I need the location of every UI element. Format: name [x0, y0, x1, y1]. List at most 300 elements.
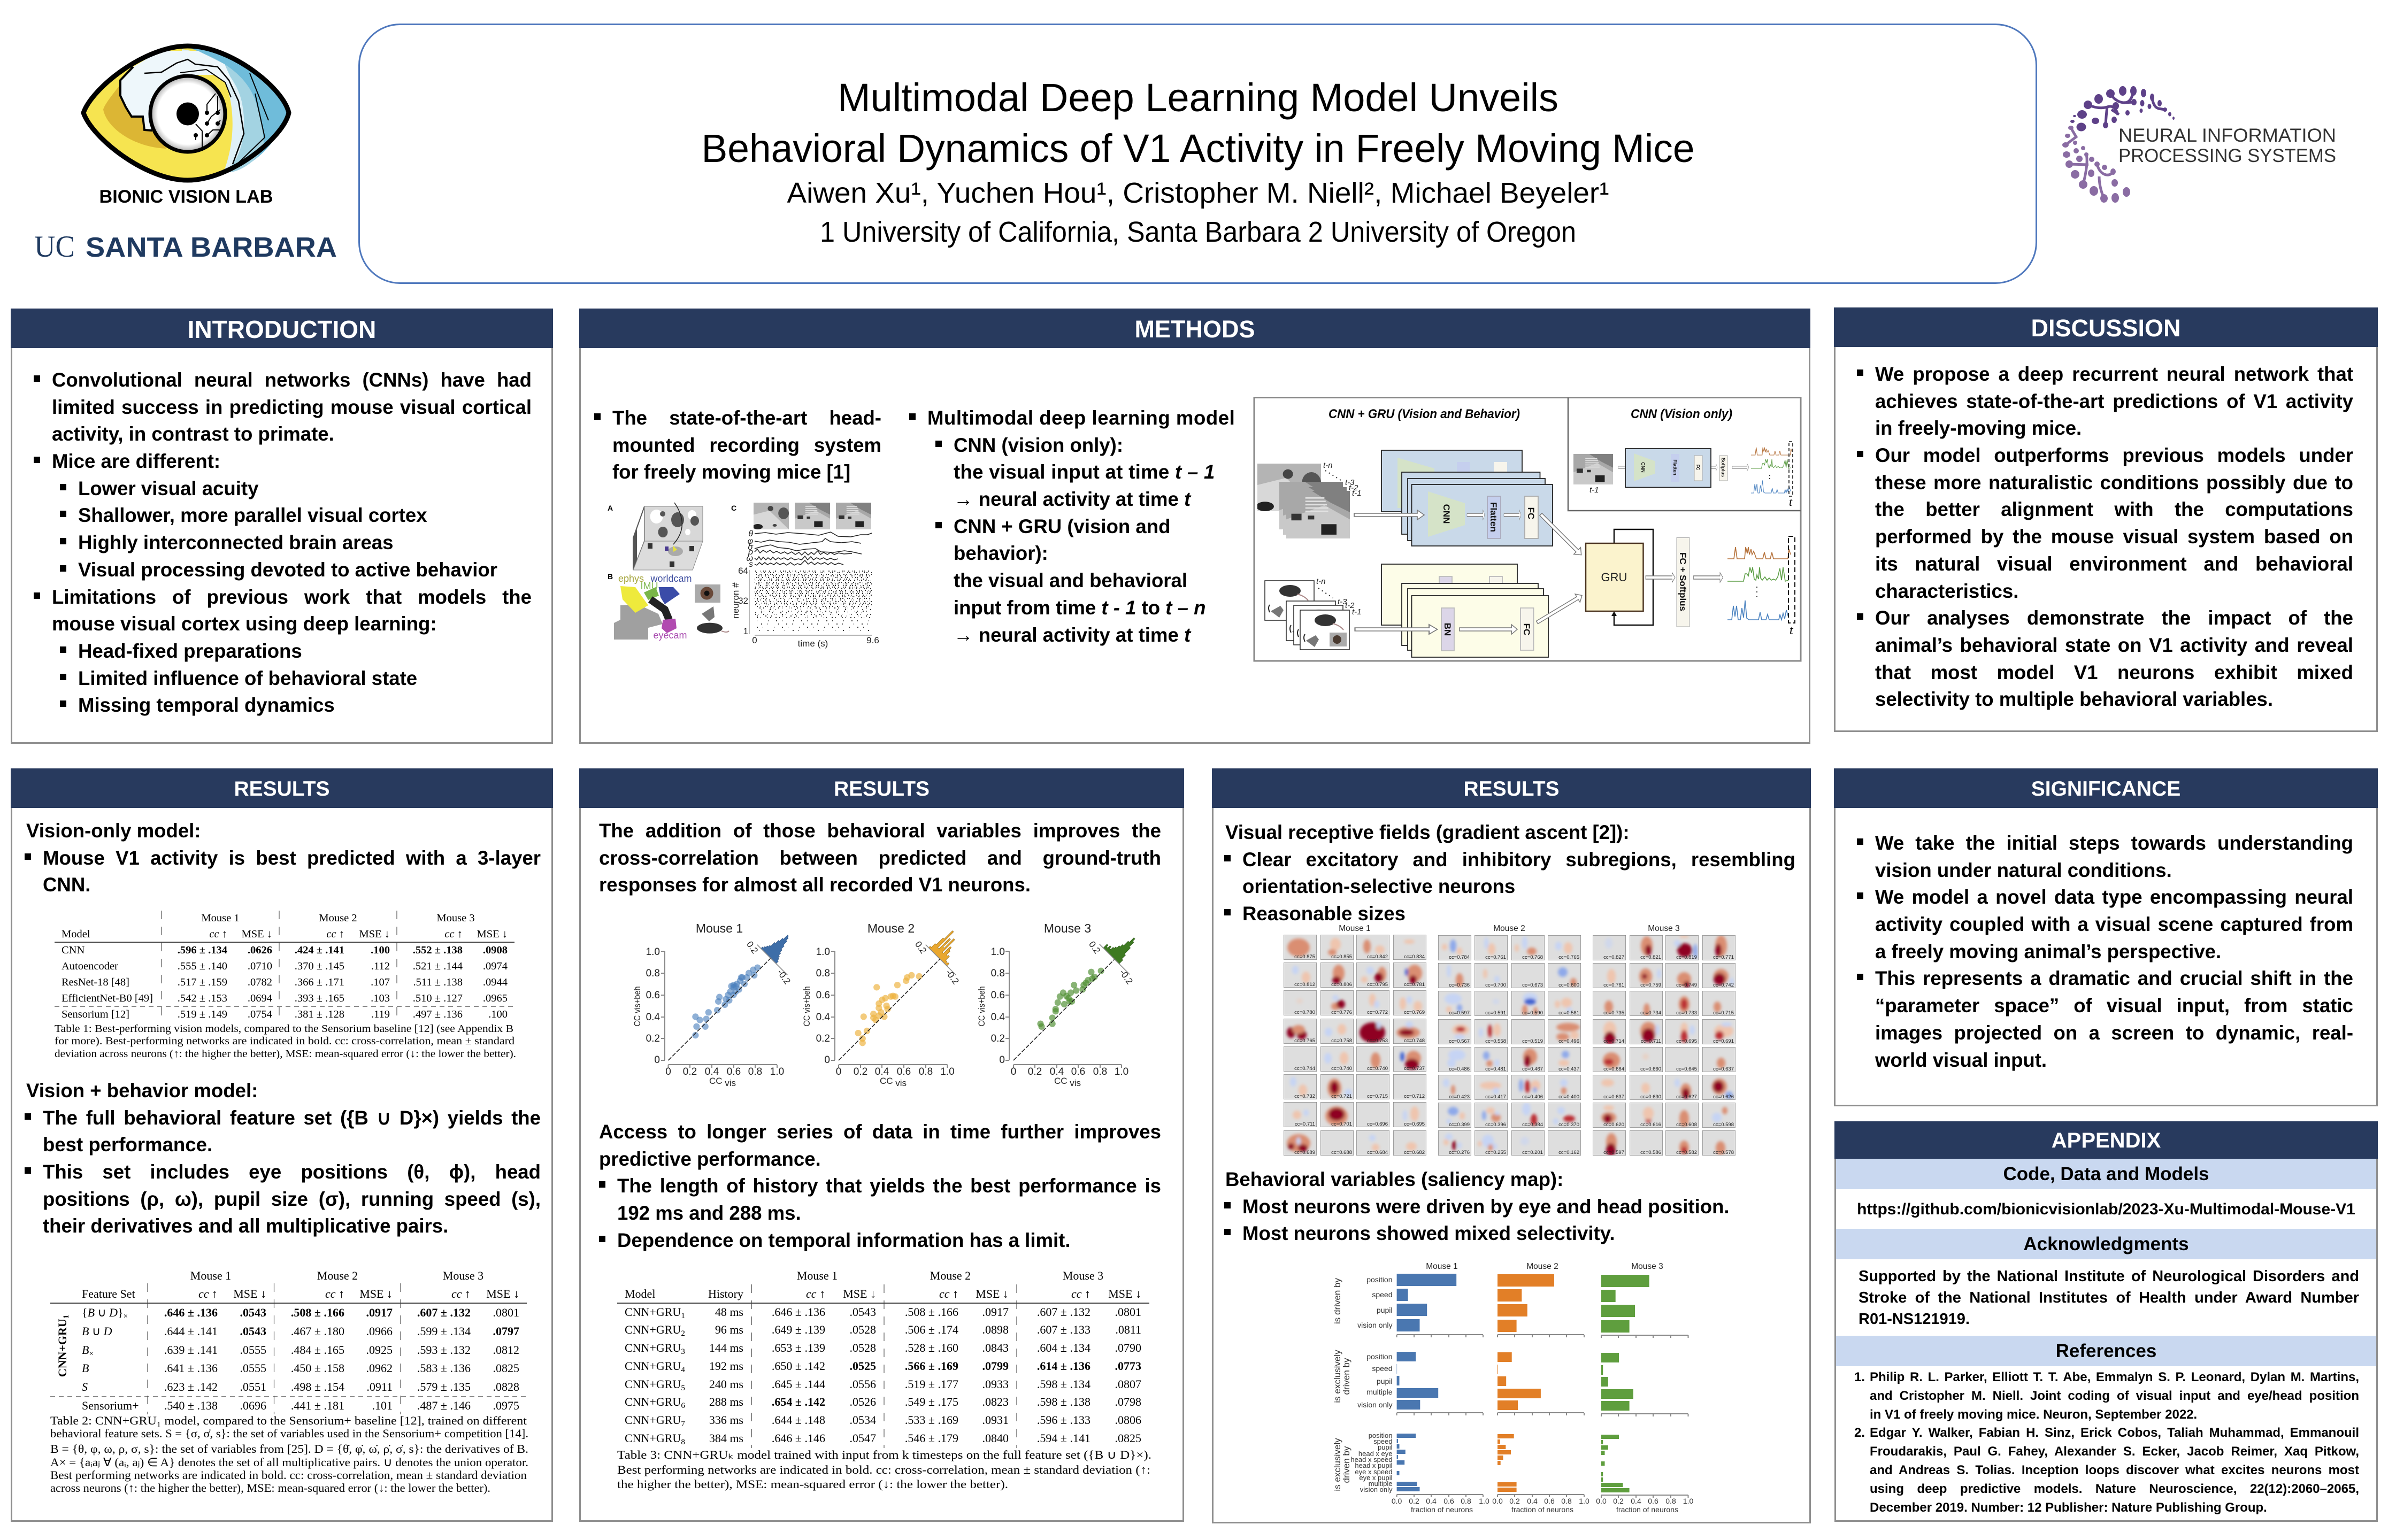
table 2: .0801 [493, 1306, 519, 1319]
CNN stack [1381, 450, 1553, 546]
table 3: .0799 [982, 1359, 1009, 1373]
table 1: .497 ± .136 [413, 1008, 463, 1020]
table 2: .583 ± .136 [417, 1361, 471, 1375]
receptive fields: mouse 2: cc=0.276 [1449, 1150, 1470, 1156]
table 3: .528 ± .160 [905, 1341, 958, 1354]
text: discussion bullets: these more naturalistic conditions possibly due to [1875, 472, 2353, 494]
axis tick labels: 0.8 [1461, 1497, 1471, 1505]
wordmark: Bionic Vision Lab: BIONIC VISION LAB [99, 187, 273, 207]
receptive fields: mouse 3: cc=0.586 [1640, 1150, 1661, 1156]
scatter chart: mouse 1: 0 [665, 1066, 671, 1077]
table 3: Mouse 2 [930, 1269, 971, 1282]
receptive fields: mouse 1: cc=0.688 [1331, 1150, 1352, 1156]
chart titles: Mouse 3 [1631, 1262, 1663, 1271]
axis tick labels [1392, 1497, 1693, 1514]
scatter chart: mouse 1: CC vis+beh [632, 986, 642, 1027]
scatter chart: mouse 3: 0.8 [1093, 1066, 1107, 1077]
table 2: MSE ↓ [233, 1287, 266, 1300]
receptive fields: mouse 1: cc=0.711 [1295, 1121, 1315, 1127]
panel: significance [1834, 768, 2378, 1106]
heading: introduction: INTRODUCTION [188, 315, 376, 343]
table 3: .649 ± .139 [772, 1323, 825, 1336]
text: acknowledgments: Supported by the National Institute of Neurological Disorders and [1859, 1268, 2359, 1285]
vision-only model: FC [1695, 465, 1700, 471]
icon: eye with wave [83, 46, 289, 180]
text: significance bullets [1857, 832, 2353, 1071]
row group: exclusive with interactions: head x pupil [1355, 1461, 1393, 1469]
panel C: stimulus and neural recordings: 32 [738, 596, 748, 606]
receptive fields: mouse 2: cc=0.768 [1522, 954, 1543, 960]
panel C: stimulus and neural recordings: 1 [743, 626, 748, 636]
table 1: .100 [371, 944, 390, 956]
table 3: .549 ± .175 [905, 1395, 958, 1408]
text: vision plus behavior model: best performance. [43, 1134, 212, 1156]
table 3: .508 ± .166 [905, 1305, 958, 1319]
axis tick labels: 0.0 [1492, 1497, 1503, 1505]
table 3: CNN+GRU [625, 1413, 681, 1427]
scatter chart: mouse 1: 1.0 [770, 1066, 784, 1077]
table 3: CNN+GRU [625, 1359, 681, 1373]
text: significance bullets: activity coupled with a visual scene captured from [1875, 913, 2353, 935]
neural activity output: t [1790, 623, 1794, 637]
receptive fields: mouse 1: cc=0.855 [1331, 954, 1352, 960]
table 3: 288 ms [709, 1395, 743, 1408]
receptive fields: mouse 2: cc=0.437 [1558, 1066, 1579, 1072]
table 3: cc ↑ [1071, 1287, 1091, 1300]
text: significance bullets: “parameter space” of visual input, from static [1875, 995, 2353, 1017]
table 3: .506 ± .174 [905, 1323, 958, 1336]
axis tick labels: 0.2 [1509, 1497, 1520, 1505]
table 2: MSE ↓ [359, 1287, 393, 1300]
table 1: .510 ± .127 [413, 992, 463, 1004]
text: behavioral variables [1224, 1168, 1730, 1244]
table 3: CNN+GRU [625, 1431, 681, 1445]
receptive fields: mouse 3: cc=0.578 [1713, 1150, 1734, 1156]
table 3: .604 ± .134 [1037, 1341, 1091, 1354]
receptive fields: mouse 3: cc=0.742 [1713, 982, 1734, 988]
table 2: across neurons (↑: the higher the better), MSE: mean-squared error (↓: the lower the better). [50, 1481, 490, 1495]
table 3: .596 ± .133 [1037, 1413, 1091, 1427]
table 3: 384 ms [709, 1431, 743, 1445]
table 1: for more). Best-performing networks are indicated in bold. cc: cross-correlation, mean ± standard [55, 1035, 514, 1047]
figure: receptive field grid [1284, 924, 1735, 1156]
table 3: .654 ± .142 [772, 1395, 825, 1408]
title: Behavioral Dynamics of V1 Activity in Freely Moving Mice [702, 126, 1694, 171]
table 3: .0528 [849, 1323, 876, 1336]
text: discussion bullets: We propose a deep recurrent neural network that [1875, 363, 2353, 385]
receptive fields: mouse 2: cc=0.201 [1522, 1150, 1543, 1156]
behavior input stack: t-n [1316, 577, 1326, 586]
text: longer history: The length of history that yields the best performance is [617, 1175, 1161, 1197]
heading: appendix: APPENDIX [2052, 1129, 2161, 1152]
text: introduction bullets: Lower visual acuity [78, 478, 258, 499]
table 1: .0782 [248, 976, 272, 988]
table 2: .644 ± .141 [164, 1325, 218, 1338]
receptive field titles: Mouse 2 [1493, 924, 1525, 933]
receptive fields: mouse 1: cc=0.712 [1404, 1094, 1425, 1099]
scatter chart: mouse 2: 0.6 [897, 1066, 911, 1077]
table 1: .517 ± .159 [178, 976, 227, 988]
panel: appendix: 2. [1854, 1426, 1865, 1440]
wordmark: UC Santa Barbara: SANTA BARBARA [86, 232, 337, 263]
table 1 [55, 911, 516, 1060]
table 2: .450 ± .158 [291, 1361, 344, 1375]
text: references: December 2019. Number: 12 Publisher: Nature Publishing Group. [1870, 1500, 2267, 1515]
receptive fields: mouse 1: cc=0.682 [1404, 1150, 1425, 1156]
axis tick labels: 0.2 [1409, 1497, 1419, 1505]
row group: is driven by: speed [1372, 1290, 1393, 1299]
row group: is exclusively driven by: driven by [1341, 1358, 1351, 1395]
text: longer history: Dependence on temporal information has a limit. [617, 1229, 1071, 1251]
scatter chart: mouse 2: CC vis+beh [802, 986, 812, 1027]
wordmark: NEURAL INFORMATION [2118, 125, 2336, 146]
panel C: stimulus and neural recordings: 9.6 [866, 635, 879, 645]
receptive fields: mouse 3: cc=0.714 [1603, 1038, 1624, 1044]
receptive fields: mouse 2: cc=0.558 [1485, 1038, 1506, 1044]
row group: is driven by: position [1366, 1275, 1393, 1284]
receptive fields: mouse 2: cc=0.673 [1522, 982, 1543, 988]
receptive fields: mouse 1: cc=0.748 [1404, 1038, 1425, 1044]
table 2 [50, 1269, 528, 1495]
chart titles: Mouse 2 [1526, 1262, 1558, 1271]
scatter chart: mouse 3: 0.6 [1071, 1066, 1085, 1077]
receptive fields: mouse 3: cc=0.616 [1640, 1122, 1661, 1128]
table 3: the higher the better), MSE: mean-squared error (↓: the lower the better). [617, 1477, 1008, 1491]
receptive fields: mouse 2: cc=0.784 [1449, 954, 1470, 960]
table 1: .103 [371, 992, 390, 1004]
table 2: .0543 [240, 1325, 266, 1338]
text: references: Froudarakis, Paul G. Fahey, Alexander S. Ecker, Jacob Reimer, Xaq Pitkow, [1870, 1444, 2359, 1459]
receptive fields: mouse 3: cc=0.733 [1676, 1010, 1697, 1016]
table 2: .467 ± .180 [291, 1325, 344, 1338]
scatter chart: mouse 2: 0.8 [816, 968, 830, 979]
table 2: .508 ± .166 [291, 1306, 344, 1319]
table 1: .555 ± .140 [178, 960, 227, 972]
receptive fields: mouse 2: cc=0.765 [1558, 954, 1579, 960]
text: introduction bullets: Visual processing devoted to active behavior [78, 559, 497, 581]
subheading: references: References [2056, 1341, 2156, 1361]
table 3: 192 ms [709, 1359, 743, 1373]
table 3: Mouse 1 [797, 1269, 838, 1282]
receptive fields: mouse 1: cc=0.875 [1294, 954, 1315, 960]
behavior input stack [1265, 577, 1362, 650]
vision-only model [1573, 442, 1793, 509]
receptive fields: mouse 3: cc=0.827 [1603, 954, 1624, 960]
receptive fields: mouse 2: cc=0.481 [1485, 1066, 1506, 1072]
table 3: .0917 [982, 1305, 1009, 1319]
table 2: .0555 [240, 1343, 266, 1357]
table 2: .0543 [240, 1306, 266, 1319]
panel C: stimulus and neural recordings [728, 503, 879, 649]
receptive fields: mouse 2: cc=0.423 [1449, 1094, 1470, 1100]
text: discussion bullets: achieves state-of-the-art predictions of V1 activity [1875, 390, 2353, 412]
text: recording system: The state-of-the-art head- [612, 407, 881, 429]
link: github url: https://github.com/bionicvisionlab/2023-Xu-Multimodal-Mouse-V1 [1857, 1200, 2355, 1218]
arrows [1354, 464, 1749, 634]
figure: model architecture: FC [1522, 623, 1532, 635]
text: introduction bullets: Missing temporal dynamics [78, 694, 335, 716]
receptive fields: mouse 3: cc=0.598 [1713, 1122, 1734, 1128]
text: introduction bullets: Head-fixed preparations [78, 640, 302, 662]
scatter chart: mouse 3: 0 [999, 1054, 1005, 1066]
vision input stack: t-1 [1352, 489, 1362, 498]
heading: results: RESULTS [834, 777, 930, 800]
table 3: 6 [681, 1402, 685, 1410]
receptive fields: mouse 1: cc=0.795 [1367, 982, 1388, 988]
scatter chart: mouse 3: Mouse 3 [1044, 921, 1091, 935]
table 1: MSE ↓ [477, 928, 508, 940]
row group: exclusive with interactions: eye x pupil [1359, 1474, 1393, 1482]
table 2: .0797 [493, 1325, 519, 1338]
text: introduction bullets: Limitations of previous work that models the [52, 586, 532, 607]
receptive fields: mouse 1: cc=0.758 [1331, 1038, 1352, 1044]
receptive fields: mouse 3: cc=0.645 [1676, 1066, 1697, 1072]
receptive fields: mouse 1: cc=0.765 [1294, 1038, 1315, 1044]
scatter chart: mouse 1: 1.0 [646, 946, 660, 958]
receptive fields: mouse 3: cc=0.771 [1713, 954, 1734, 960]
table 2: .0975 [493, 1399, 519, 1412]
receptive fields: mouse 1: cc=0.701 [1331, 1121, 1352, 1127]
panel C: stimulus and neural recordings: σ [748, 543, 754, 552]
table 3: CNN+GRU [625, 1377, 681, 1391]
table 3: .653 ± .139 [772, 1341, 825, 1354]
table 1: cc ↑ [326, 928, 344, 940]
receptive fields: mouse 3: cc=0.695 [1676, 1038, 1697, 1044]
row group: is exclusively driven by: speed [1372, 1364, 1393, 1373]
receptive fields: mouse 2: cc=0.370 [1558, 1122, 1579, 1128]
row group: exclusive with interactions: head x speed [1350, 1456, 1393, 1464]
table 3: 336 ms [709, 1413, 743, 1427]
heading: results: RESULTS [1463, 777, 1560, 800]
table 3: .0556 [849, 1377, 876, 1391]
table 1: .366 ± .171 [295, 976, 344, 988]
table 3: .0807 [1115, 1377, 1141, 1391]
text: visual receptive fields: orientation-selective neurons [1242, 875, 1515, 897]
text: discussion bullets: Our analyses demonstrate the impact of the [1875, 607, 2353, 629]
scatter chart: mouse 3: CC vis+beh [977, 986, 987, 1027]
scatter chart: mouse 1: 0.2 [683, 1066, 697, 1077]
table 2: cc ↑ [325, 1287, 344, 1300]
axis tick labels: 0.6 [1544, 1497, 1555, 1505]
scatter chart: mouse 2: 0.8 [919, 1066, 933, 1077]
table 1: .0754 [248, 1008, 272, 1020]
text: recording system [594, 407, 881, 483]
receptive field titles [1339, 924, 1680, 933]
scatter chart: mouse 2: 0.4 [875, 1066, 889, 1077]
scatter chart: mouse 2: 1.0 [816, 946, 830, 958]
table 3: .607 ± .133 [1037, 1323, 1091, 1336]
receptive fields: mouse 3: cc=0.734 [1640, 1010, 1661, 1016]
receptive fields: mouse 1: cc=0.834 [1404, 954, 1425, 960]
receptive fields: mouse 3: cc=0.627 [1676, 1094, 1697, 1100]
table 2: .487 ± .146 [417, 1399, 471, 1412]
receptive fields: mouse 1: cc=0.684 [1367, 1150, 1388, 1156]
table 2: .0917 [366, 1306, 393, 1319]
table 3: .614 ± .136 [1037, 1359, 1091, 1373]
table 2: Mouse 2 [317, 1269, 358, 1282]
text: introduction bullets: mouse visual cortex using deep learning: [52, 613, 437, 635]
table 3: 2 [681, 1329, 685, 1338]
receptive fields: mouse 2: cc=0.255 [1485, 1150, 1506, 1156]
table 1: Mouse 1 [201, 912, 240, 924]
table 3: 48 ms [715, 1305, 743, 1319]
text: introduction bullets: Highly interconnected brain areas [78, 532, 393, 553]
scatter chart: mouse 2: 0.6 [816, 990, 830, 1001]
text: longer history [599, 1121, 1161, 1251]
axis tick labels: 1.0 [1479, 1497, 1489, 1505]
table 3: Model [625, 1287, 655, 1300]
receptive fields: mouse 3: cc=0.715 [1713, 1010, 1734, 1016]
panel A: arena: A [608, 504, 613, 512]
text: longer history: Access to longer series of data in time further improves [599, 1121, 1161, 1143]
row group: exclusive with interactions: head x eye [1358, 1450, 1393, 1458]
text: discussion bullets: its natural visual environment and behavioral [1875, 553, 2353, 575]
figure: model architecture: FC [1526, 507, 1536, 519]
table 3: 3 [681, 1348, 685, 1356]
table 2: B ∪ D [82, 1325, 112, 1338]
axis tick labels: 1.0 [1683, 1497, 1693, 1505]
text: vision plus behavior model: their derivatives and all multiplicative pairs. [43, 1215, 448, 1237]
panel B: head mount: IMU [641, 581, 658, 591]
table 1: cc ↑ [209, 928, 227, 940]
heading: discussion: DISCUSSION [2031, 314, 2181, 342]
table 3: .0806 [1115, 1413, 1141, 1427]
scatter chart: mouse 2 [802, 921, 976, 1088]
table 2: CNN+GRU [56, 1319, 69, 1377]
axis tick labels: 0.8 [1665, 1497, 1676, 1505]
table 2: .498 ± .154 [291, 1380, 344, 1393]
table 3: 144 ms [709, 1341, 743, 1354]
table 1: .370 ± .145 [295, 960, 344, 972]
scatter chart: mouse 2: 0 [824, 1054, 830, 1066]
text: multimodal model: CNN + GRU (vision and [954, 515, 1170, 537]
row group: is driven by [1332, 1274, 1688, 1338]
table 2: .607 ± .132 [417, 1306, 471, 1319]
scatter chart: mouse 1: CC [709, 1076, 723, 1086]
table 1: .381 ± .128 [295, 1008, 344, 1020]
receptive fields: mouse 2: cc=0.590 [1522, 1010, 1543, 1016]
receptive fields: mouse 3: cc=0.819 [1676, 954, 1697, 960]
text: discussion bullets: the better alignment with the computations [1875, 498, 2353, 520]
row group: exclusive with interactions: vision only [1360, 1485, 1393, 1493]
receptive fields: mouse 3: cc=0.821 [1640, 954, 1661, 960]
receptive fields: mouse 2: cc=0.567 [1449, 1038, 1470, 1044]
row group: exclusive with interactions: multiple [1369, 1480, 1393, 1488]
text: introduction bullets: Convolutional neural networks (CNNs) have had [52, 369, 532, 391]
text: multimodal model: input from time t - 1 to t – n [954, 597, 1205, 619]
text: vision plus behavior model: This set includes eye positions (θ, ϕ), head [43, 1161, 541, 1183]
table 1: cc ↑ [444, 928, 463, 940]
table 3: .594 ± .141 [1037, 1431, 1091, 1445]
row group: is driven by: pupil [1377, 1306, 1393, 1314]
text: multimodal model: → neural activity at time t [954, 623, 1191, 646]
row group: exclusive with interactions: position [1369, 1431, 1393, 1439]
receptive fields: mouse 3: cc=0.597 [1603, 1150, 1624, 1156]
row group: exclusive with interactions: eye x speed [1355, 1468, 1393, 1476]
receptive fields: mouse 3: cc=0.620 [1603, 1122, 1624, 1128]
table 1: .424 ± .141 [295, 944, 344, 956]
receptive fields: mouse 2: cc=0.597 [1449, 1010, 1470, 1016]
table 3: 240 ms [709, 1377, 743, 1391]
table 2: .0551 [240, 1380, 266, 1393]
receptive fields: mouse 2: cc=0.486 [1449, 1066, 1470, 1072]
receptive fields: mouse 1: cc=0.737 [1404, 1066, 1425, 1072]
receptive fields: mouse 1: cc=0.753 [1367, 1038, 1388, 1044]
text: recording system: for freely moving mice [1] [612, 461, 850, 483]
table 3: .0790 [1115, 1341, 1141, 1354]
table 3: .646 ± .136 [772, 1305, 825, 1319]
panel C: stimulus and neural recordings: φ [748, 537, 753, 546]
receptive fields: mouse 3: cc=0.749 [1676, 982, 1697, 988]
panel: results receptive fields and saliency [1212, 768, 1811, 1523]
receptive fields: mouse 1: cc=0.776 [1331, 1010, 1352, 1015]
text: introduction bullets: Mice are different: [52, 450, 220, 472]
diagram titles: CNN (Vision only) [1631, 407, 1732, 421]
scatter chart: mouse 1: 0.8 [748, 1066, 762, 1077]
table 2: .623 ± .142 [164, 1380, 218, 1393]
scatter chart: mouse 1: vis [723, 1078, 736, 1088]
scatter chart: mouse 2: 0 [836, 1066, 841, 1077]
table 3: .0528 [849, 1341, 876, 1354]
receptive fields: mouse 1: cc=0.812 [1294, 982, 1315, 988]
scatter chart: mouse 3: 0.4 [991, 1012, 1005, 1023]
table 1: Sensorium [12] [62, 1008, 129, 1020]
text: discussion bullets: characteristics. [1875, 580, 2018, 602]
scatter chart: mouse 1: Mouse 1 [696, 921, 743, 935]
table 3: .645 ± .144 [772, 1377, 825, 1391]
table 1: Mouse 3 [436, 912, 475, 924]
logo: Neural Information Processing Systems [2062, 86, 2336, 203]
text: vision plus behavior model [25, 1080, 541, 1237]
scatter chart: mouse 1: 0 [654, 1054, 660, 1066]
table 3: MSE ↓ [1108, 1287, 1141, 1300]
panel B: head mount: B [608, 572, 613, 581]
table 1: .596 ± .134 [178, 944, 227, 956]
table 3: .0840 [982, 1431, 1009, 1445]
text: discussion bullets: in freely-moving mice. [1875, 417, 2082, 439]
table 3: Table 3: CNN+GRUₖ model trained with input from k timesteps on the full feature set ({B ∪ D}×). [617, 1448, 1151, 1461]
scatter chart: mouse 1: 0.4 [646, 1012, 660, 1023]
table 1: .0694 [248, 992, 272, 1004]
scatter chart: mouse 2: -0.2 [943, 967, 961, 986]
table 3: .519 ± .177 [905, 1377, 958, 1391]
subheading: references [1836, 1336, 2376, 1366]
row group: is exclusively driven by: vision only [1357, 1400, 1393, 1409]
row group: is driven by: vision only [1357, 1321, 1393, 1329]
wordmark [2118, 125, 2336, 166]
vision input stack: t-3 [1345, 478, 1355, 487]
text: vision plus behavior model: The full behavioral feature set ({B ∪ D}×) yields the [43, 1107, 541, 1129]
text: discussion bullets: selectivity to multiple behavioral variables. [1875, 688, 2273, 710]
BN stack [1381, 564, 1548, 657]
table 2: .593 ± .132 [417, 1343, 471, 1357]
table 2: .0825 [493, 1361, 519, 1375]
text: references: using deep predictive models. Nature Neuroscience, 22(12):2060–2065, [1870, 1482, 2359, 1496]
text: longer history: 192 ms and 288 ms. [617, 1202, 801, 1224]
title [702, 75, 1694, 171]
text: references [1854, 1370, 2359, 1515]
receptive fields: mouse 1: cc=0.721 [1331, 1094, 1352, 1099]
table 2: MSE ↓ [486, 1287, 519, 1300]
axis tick labels: 0.0 [1392, 1497, 1402, 1505]
table 3: CNN+GRU [625, 1341, 681, 1354]
scatter chart: mouse 1: 0.2 [744, 940, 760, 956]
text: discussion bullets [1857, 363, 2353, 710]
text: acknowledgments [1859, 1268, 2359, 1328]
receptive fields: mouse 2 [1438, 935, 1581, 1156]
text: significance bullets: We model a novel data type encompassing neural [1875, 886, 2353, 908]
authors: Aiwen Xu¹, Yuchen Hou¹, Cristopher M. Niell², Michael Beyeler¹ [787, 177, 1609, 209]
